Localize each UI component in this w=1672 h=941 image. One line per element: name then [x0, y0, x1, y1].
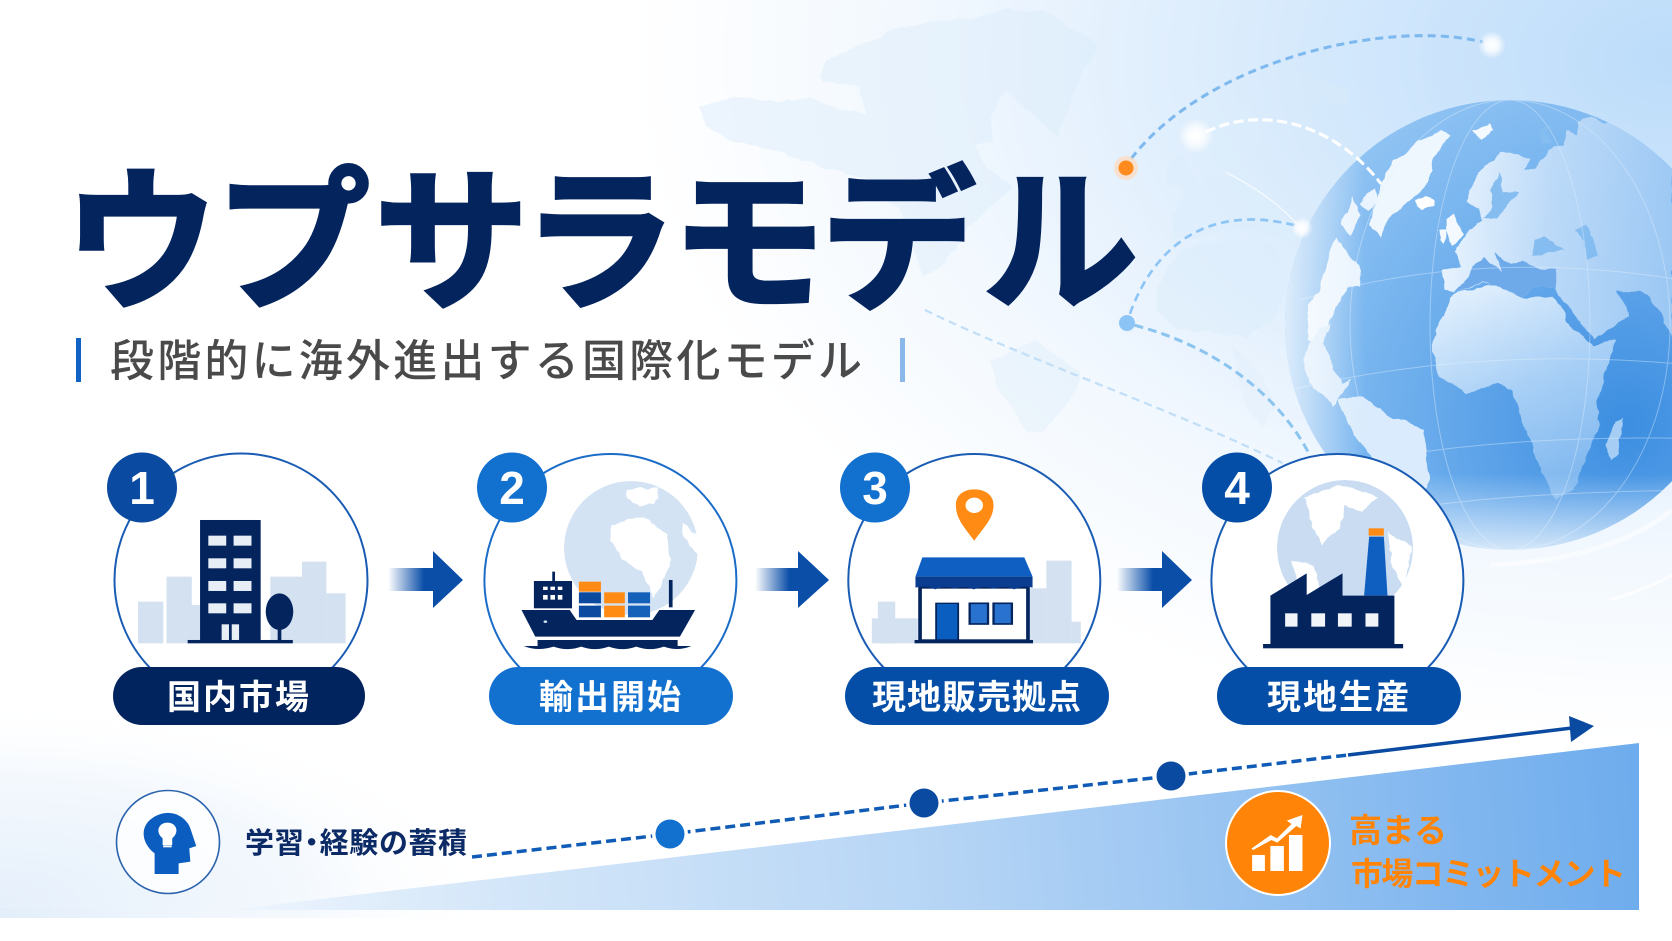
commitment wedge [230, 743, 1639, 910]
orbit rings [1490, 510, 1672, 600]
icon: office building [138, 520, 346, 643]
commitment label: 高まる [1349, 812, 1447, 849]
step 4 label [1217, 667, 1461, 725]
growth line with milestones [472, 716, 1594, 857]
step 4 badge: 4 [1224, 462, 1250, 514]
step 1 label: 国内市場 [167, 679, 311, 717]
step 2: export start [477, 452, 736, 725]
step 2 label [489, 667, 733, 725]
commitment label [1349, 812, 1626, 892]
step 3 badge [840, 452, 910, 522]
step 3 circle [848, 454, 1100, 706]
step 4 label: 現地生産 [1267, 679, 1411, 717]
icon: orange growth chart [1226, 791, 1330, 895]
step 3 badge: 3 [862, 462, 888, 514]
icon: orange map pin [956, 489, 994, 541]
step 1: domestic market [107, 452, 368, 725]
icon: store [872, 557, 1081, 643]
commitment label: 市場コミットメント [1351, 856, 1626, 892]
icon: globe [1277, 480, 1413, 596]
route nodes [1114, 31, 1506, 331]
step 4: local production [1202, 452, 1463, 725]
faint world map [701, 8, 1352, 433]
arrow 3 [1117, 551, 1192, 608]
icon: factory [1263, 528, 1403, 648]
arrow 2 [755, 551, 829, 608]
learning label: 学習・経験の蓄積 [245, 827, 467, 860]
step 3: local sales base [840, 452, 1109, 725]
step 3 label [845, 667, 1109, 725]
step 1 label [113, 667, 365, 725]
step 4 circle [1211, 454, 1463, 706]
icon: cargo ship [521, 572, 695, 649]
title: ウプサラモデル [64, 157, 1138, 330]
subtitle: 段階的に海外進出する国際化モデル [110, 337, 862, 386]
step 2 badge [477, 452, 547, 522]
step 1 circle [114, 454, 368, 706]
icon: head with light bulb [116, 790, 220, 894]
step 1 badge: 1 [129, 462, 155, 514]
step 3 label: 現地販売拠点 [872, 679, 1082, 717]
icon: globe [564, 481, 700, 615]
step 4 badge [1202, 452, 1272, 522]
globe [1285, 100, 1672, 550]
step 2 badge: 2 [499, 462, 525, 514]
arrow 1 [388, 551, 463, 608]
network routes [925, 36, 1483, 463]
globe grid lines [1290, 100, 1672, 550]
step 2 label: 輸出開始 [539, 679, 683, 717]
step 2 circle [484, 454, 736, 706]
continents [1304, 115, 1672, 509]
step 1 badge [107, 452, 177, 522]
